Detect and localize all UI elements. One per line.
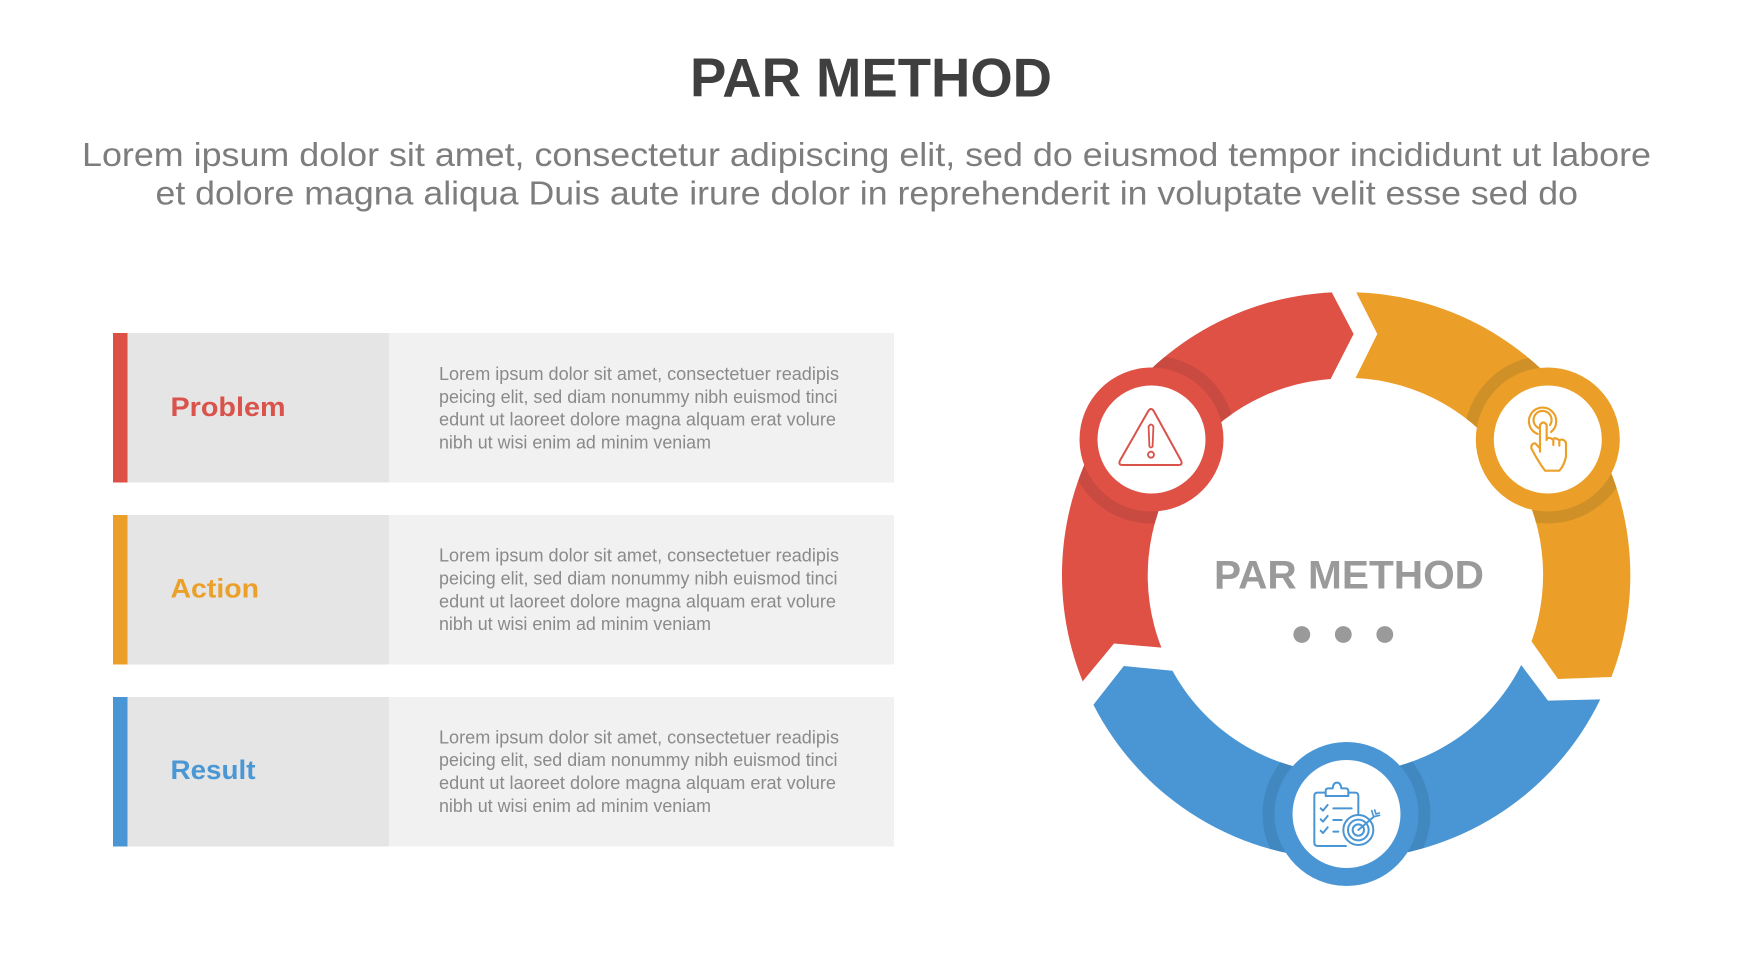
text block: result description (439, 726, 839, 816)
text block: problem description: nibh ut wisi enim ad minim veniam (439, 431, 711, 452)
subtitle text block (82, 136, 1651, 212)
text block: problem description: Lorem ipsum dolor sit amet, consectetuer readipis (439, 363, 839, 384)
text block: problem description (439, 363, 839, 452)
center dots (1293, 626, 1393, 643)
text block: result description: nibh ut wisi enim ad minim veniam (439, 795, 711, 816)
icon: tap hand badge (1476, 368, 1620, 512)
text block: action description: peicing elit, sed diam nonummy nibh euismod tinci (439, 568, 838, 588)
text block: problem description: edunt ut laoreet dolore magna alquam erat volure (439, 409, 836, 430)
text block: action description (439, 545, 839, 634)
label: action: Action (170, 574, 259, 604)
panel: problem (113, 333, 894, 482)
icon: warning triangle badge (1080, 368, 1224, 512)
arrow: orange action segment (1356, 292, 1632, 679)
subtitle text block: Lorem ipsum dolor sit amet, consectetur adipiscing elit, sed do eiusmod tempor incididunt ut labore (82, 136, 1651, 173)
text block: action description: nibh ut wisi enim ad minim veniam (439, 613, 711, 634)
subtitle text block: et dolore magna aliqua Duis aute irure dolor in reprehenderit in voluptate velit esse sed do (156, 174, 1578, 212)
arrow: blue result segment (1093, 665, 1600, 853)
text block: result description: peicing elit, sed diam nonummy nibh euismod tinci (439, 749, 838, 770)
label: problem: Problem (170, 392, 286, 422)
label: result: Result (170, 755, 256, 785)
text block: action description: edunt ut laoreet dolore magna alquam erat volure (439, 590, 836, 611)
title: PAR METHOD (690, 46, 1052, 108)
center label: PAR METHOD (1214, 553, 1484, 597)
text block: action description: Lorem ipsum dolor sit amet, consectetuer readipis (439, 545, 839, 566)
panel: result (113, 697, 894, 846)
text block: result description: Lorem ipsum dolor sit amet, consectetuer readipis (439, 726, 839, 747)
icon: checklist and target badge (1274, 742, 1418, 886)
panel: action (113, 515, 894, 664)
text block: result description: edunt ut laoreet dolore magna alquam erat volure (439, 772, 836, 793)
text block: problem description: peicing elit, sed diam nonummy nibh euismod tinci (439, 386, 838, 407)
arrow: red problem segment (1062, 292, 1354, 681)
